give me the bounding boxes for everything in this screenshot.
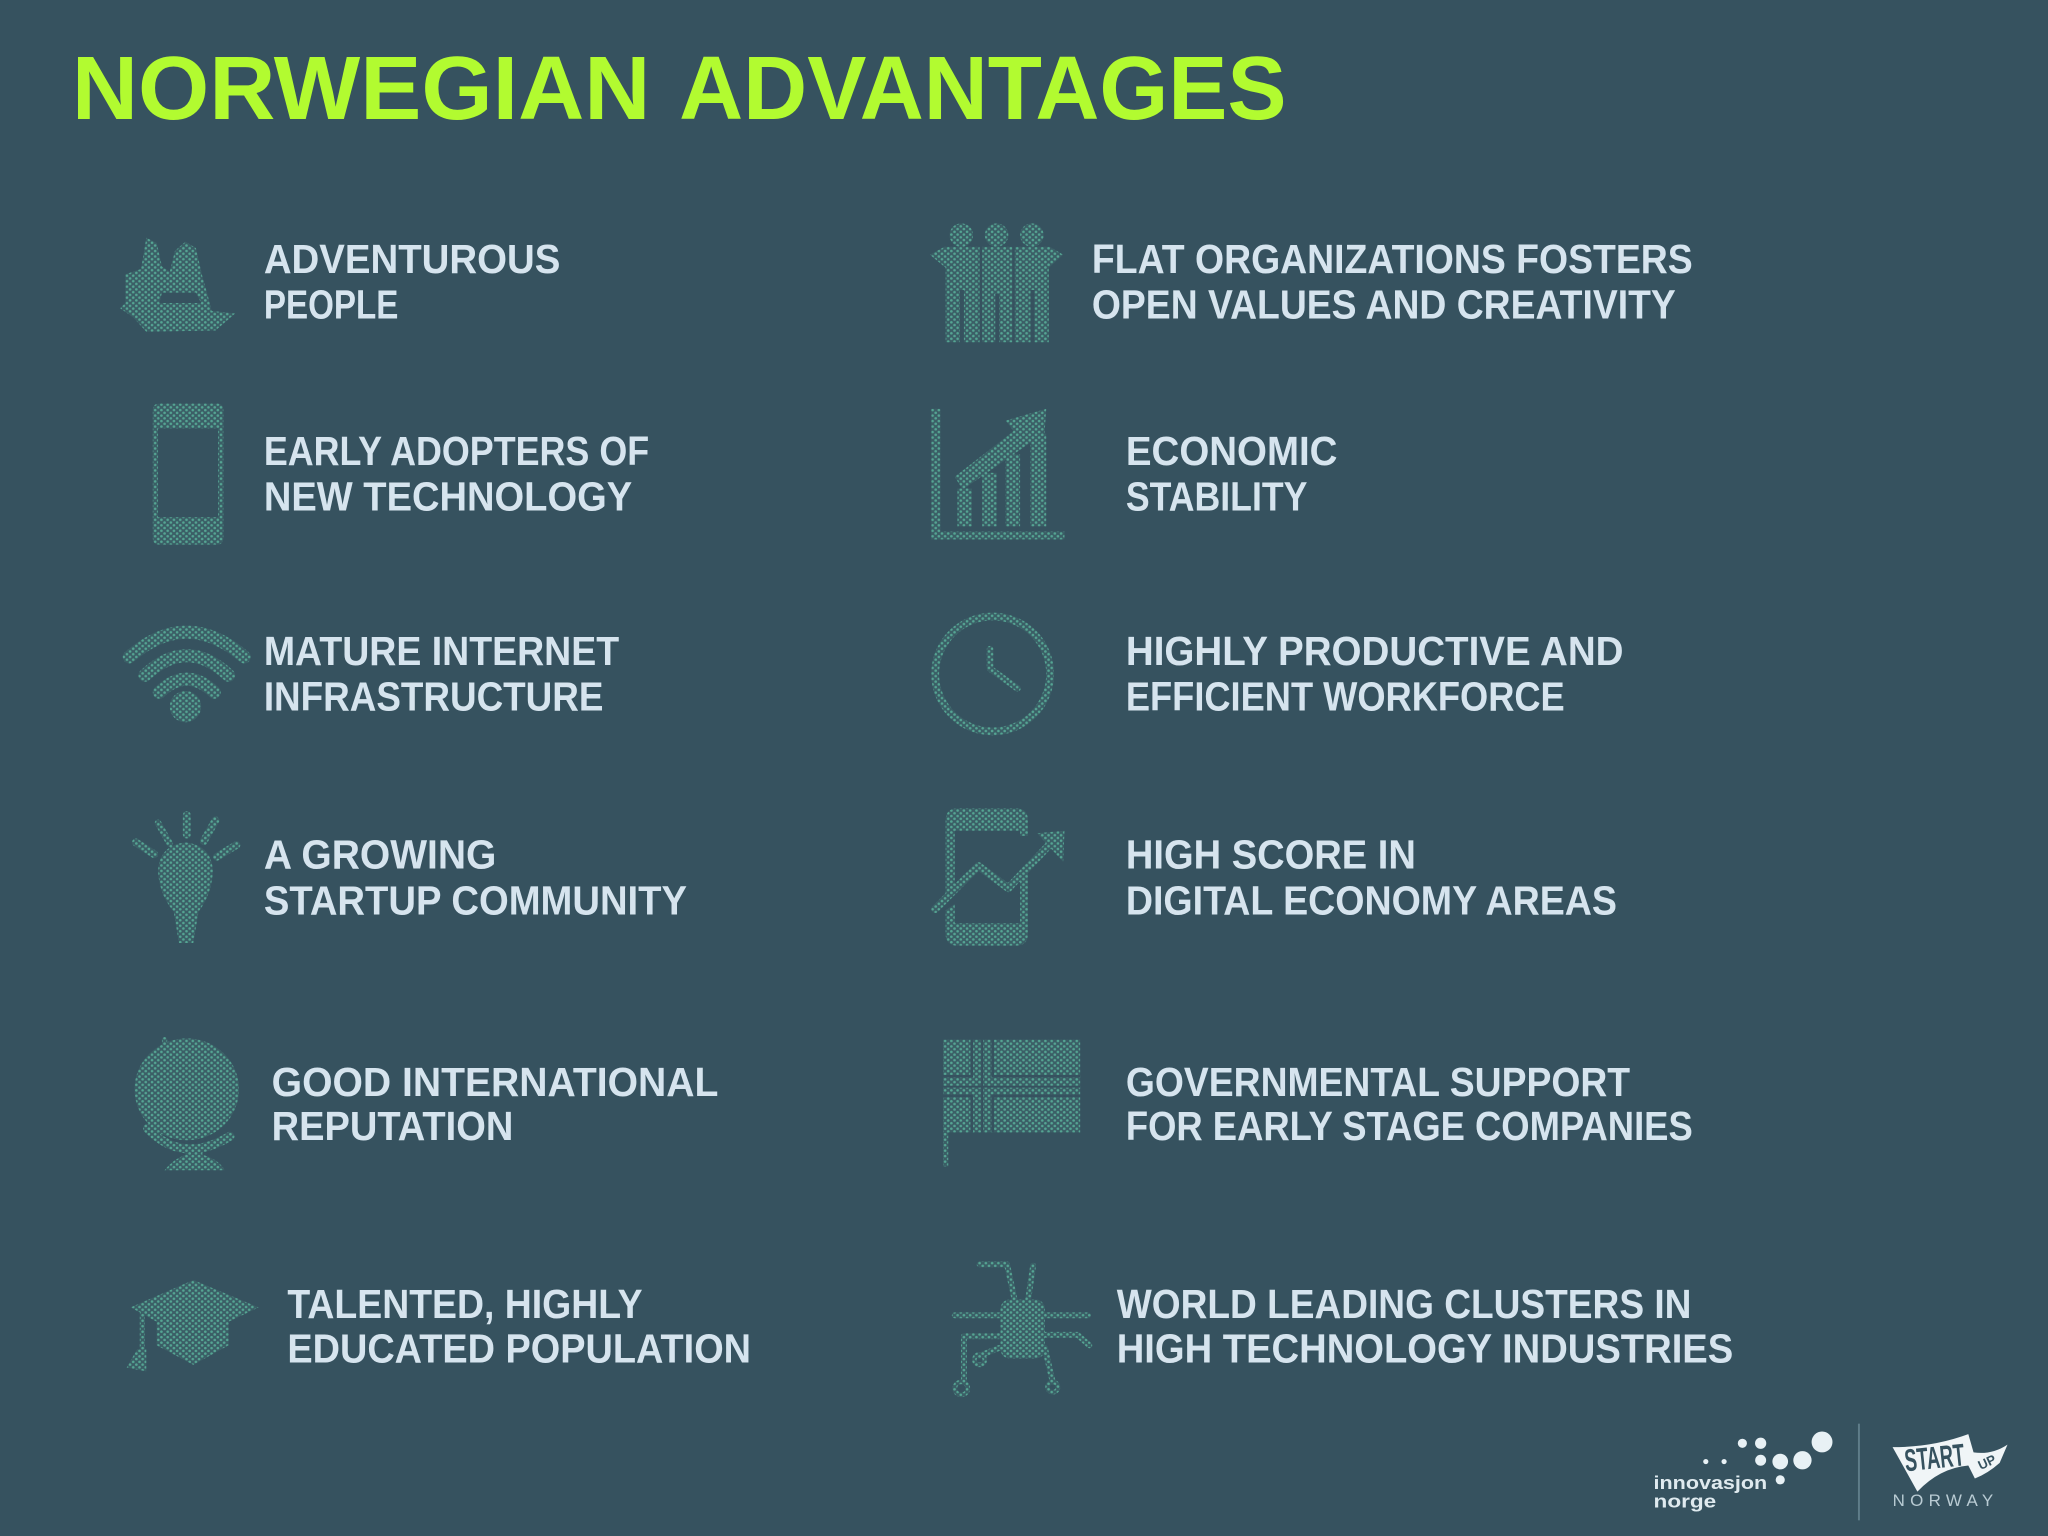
text: early adopters: EARLY ADOPTERS OF <box>264 428 649 474</box>
text: digital economy: DIGITAL ECONOMY AREAS <box>1126 877 1617 923</box>
text: international reputation: GOOD INTERNATIONAL <box>272 1059 718 1105</box>
item: governmental support <box>943 1040 1693 1166</box>
text: educated population <box>287 1281 751 1371</box>
text: early adopters <box>264 428 649 520</box>
text: governmental support <box>1126 1059 1693 1149</box>
text: flat organizations: OPEN VALUES AND CREATIVITY <box>1092 282 1676 328</box>
text: internet infrastructure: MATURE INTERNET <box>264 628 619 674</box>
text: digital economy <box>1126 832 1617 923</box>
item: digital economy <box>935 808 1617 946</box>
logo: startup norway: UP <box>1976 1451 1999 1473</box>
logo: innovasjon norge <box>1654 1432 1832 1511</box>
text: flat organizations <box>1092 236 1693 328</box>
text: productive workforce: HIGHLY PRODUCTIVE AND <box>1126 628 1624 674</box>
text: early adopters: NEW TECHNOLOGY <box>264 474 632 520</box>
icon: globe <box>135 1038 239 1170</box>
text: startup community: A GROWING <box>264 832 496 878</box>
icon: phone with trend arrow <box>935 808 1064 946</box>
icon: viking ship <box>120 238 235 332</box>
icon: norwegian flag <box>943 1040 1080 1166</box>
item: technology clusters <box>955 1264 1733 1395</box>
icon: wifi <box>129 632 244 722</box>
text: governmental support: GOVERNMENTAL SUPPORT <box>1126 1059 1630 1105</box>
text: adventurous people: PEOPLE <box>264 282 398 328</box>
icon: clock <box>935 616 1050 731</box>
text: productive workforce <box>1126 628 1624 720</box>
item: international reputation <box>135 1038 718 1170</box>
logo: startup norway: NORWAY <box>1893 1491 1993 1510</box>
item: economic stability <box>931 409 1337 539</box>
text: digital economy: HIGH SCORE IN <box>1126 832 1416 878</box>
text: economic stability: ECONOMIC <box>1126 428 1337 474</box>
text: adventurous people: ADVENTUROUS <box>264 236 560 282</box>
icon: circuit chip <box>955 1264 1089 1395</box>
logo: innovasjon norge: innovasjon <box>1654 1472 1767 1493</box>
text: educated population: TALENTED, HIGHLY <box>287 1281 643 1327</box>
divider <box>1858 1424 1860 1520</box>
text: startup community <box>264 832 687 923</box>
item: startup community <box>136 815 687 943</box>
title <box>72 38 1287 139</box>
icon: graduation cap <box>127 1280 259 1371</box>
title: NORWEGIAN <box>72 38 650 139</box>
logo: startup norway <box>1893 1434 2008 1510</box>
logo: innovasjon norge: norge <box>1654 1490 1716 1511</box>
logo: startup norway: START <box>1903 1437 1966 1478</box>
text: economic stability <box>1126 428 1337 520</box>
text: international reputation: REPUTATION <box>272 1103 513 1149</box>
item: flat organizations <box>930 223 1693 342</box>
text: adventurous people <box>264 236 560 328</box>
text: flat organizations: FLAT ORGANIZATIONS FOSTERS <box>1092 236 1693 282</box>
text: technology clusters: HIGH TECHNOLOGY INDUSTRIES <box>1117 1325 1733 1371</box>
icon: light bulb <box>136 815 236 943</box>
item: productive workforce <box>935 616 1624 731</box>
text: internet infrastructure <box>264 628 619 720</box>
title: ADVANTAGES <box>679 38 1287 139</box>
text: educated population: EDUCATED POPULATION <box>287 1325 751 1371</box>
text: economic stability: STABILITY <box>1126 474 1307 520</box>
item: early adopters <box>153 404 649 545</box>
item: adventurous people <box>120 236 560 332</box>
text: internet infrastructure: INFRASTRUCTURE <box>264 674 603 720</box>
icon: smartphone <box>153 404 223 545</box>
text: productive workforce: EFFICIENT WORKFORCE <box>1126 674 1565 720</box>
text: startup community: STARTUP COMMUNITY <box>264 877 687 923</box>
item: educated population <box>127 1280 751 1371</box>
text: international reputation <box>272 1059 718 1149</box>
text: technology clusters: WORLD LEADING CLUSTERS IN <box>1117 1281 1691 1327</box>
icon: growth chart <box>931 409 1064 539</box>
text: governmental support: FOR EARLY STAGE COMPANIES <box>1126 1103 1693 1149</box>
text: technology clusters <box>1117 1281 1733 1371</box>
item: internet infrastructure <box>129 628 619 722</box>
icon: three people <box>930 223 1063 342</box>
